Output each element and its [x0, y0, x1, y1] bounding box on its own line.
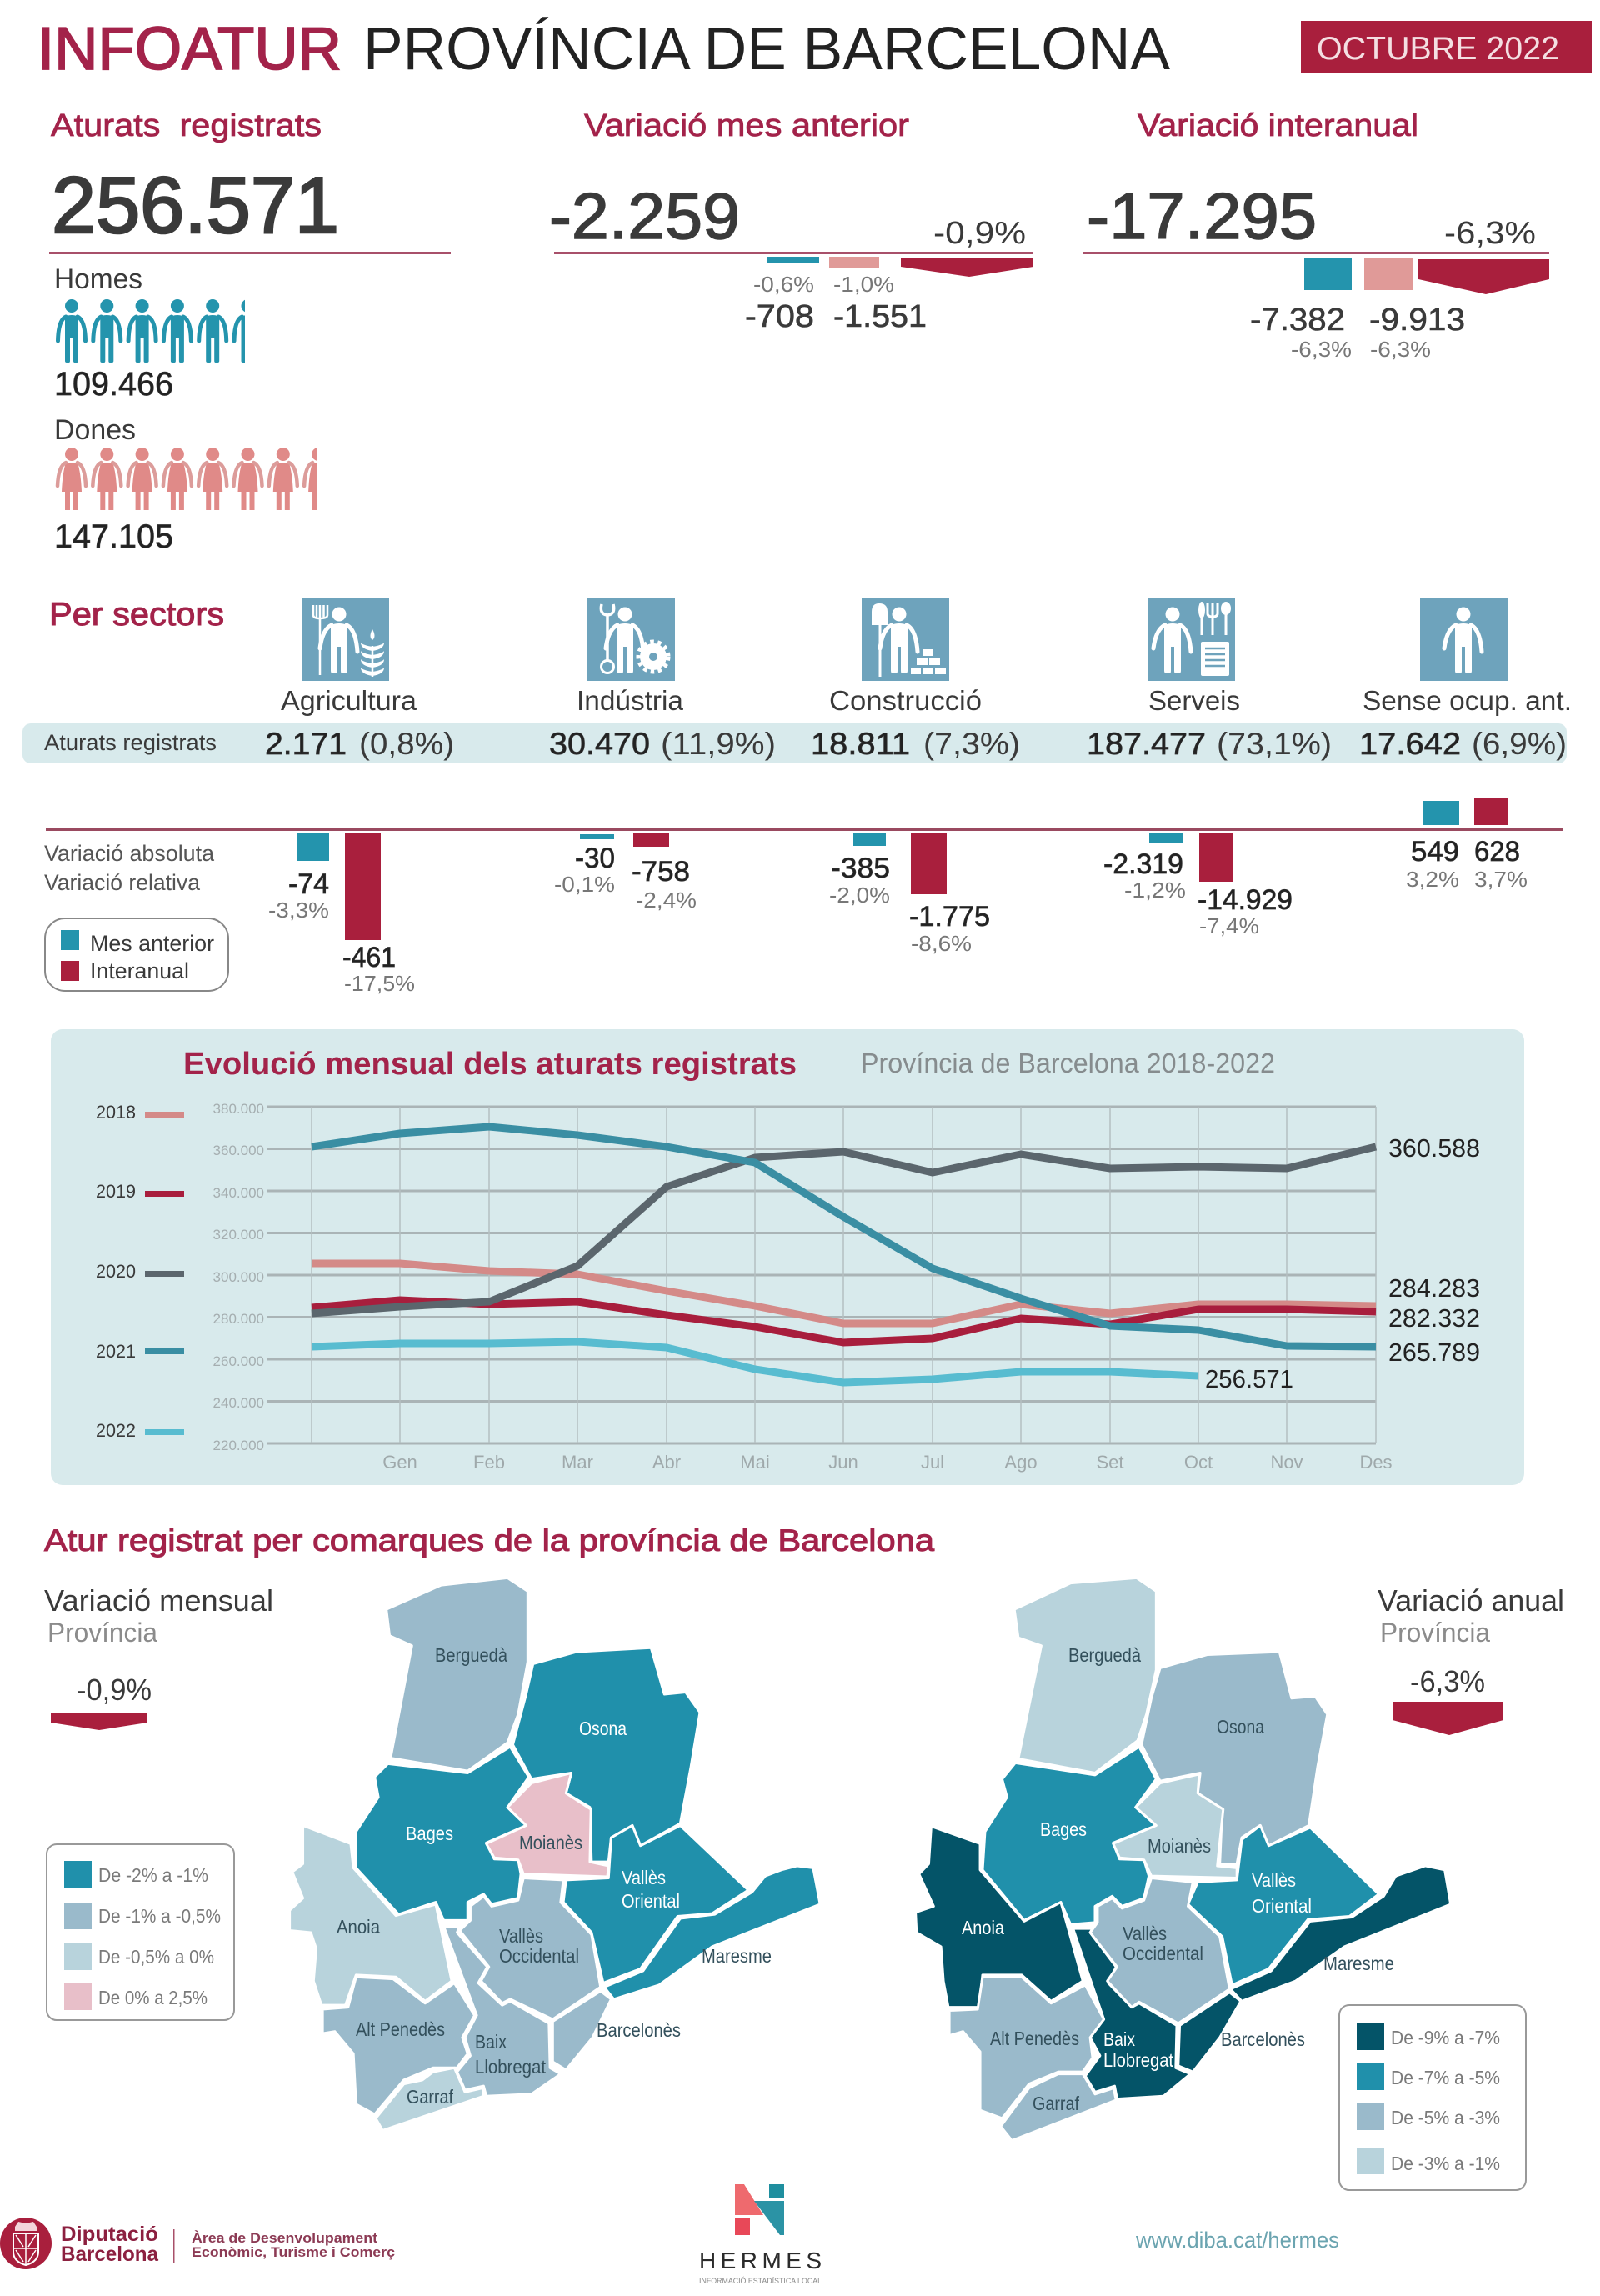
sector labels: Agricultura	[281, 685, 418, 716]
map labels: Berguedà	[1068, 1644, 1141, 1666]
sector labels	[281, 685, 1572, 716]
panel: variació anual	[916, 1578, 1564, 2190]
percent: -0,9%	[933, 216, 1026, 251]
map labels: Occidental	[499, 1945, 579, 1967]
x axis labels	[382, 1452, 1392, 1473]
series 2020	[312, 1147, 1376, 1313]
footer: website: www.diba.cat/hermes	[1135, 2228, 1339, 2253]
Vallès Oriental	[563, 1825, 748, 1983]
Vallès Occidental	[460, 1878, 601, 2019]
subheading: província: Província	[1380, 1618, 1490, 1648]
panel: variació mes anterior	[549, 108, 1033, 334]
x axis labels: Gen	[382, 1452, 418, 1473]
Alt Penedès	[322, 1977, 475, 2114]
indústria bars: -2,4%	[636, 888, 697, 913]
heading: evolució mensual: Evolució mensual dels aturats registrats	[183, 1047, 797, 1082]
breakdown numbers: -0,6%	[753, 272, 814, 297]
icon: women pictogram	[58, 448, 332, 510]
x axis labels: Feb	[473, 1452, 505, 1473]
series 2022	[312, 1342, 1198, 1383]
year legend: 2022	[96, 1420, 136, 1441]
total value: 256.571	[52, 161, 339, 250]
end values: 360.588	[1388, 1133, 1480, 1163]
agricultura bars: -461	[342, 942, 396, 973]
panel: aturats registrats	[49, 108, 451, 555]
y axis labels	[213, 1101, 264, 1453]
map labels: Garraf	[1032, 2093, 1080, 2114]
Maresme	[604, 1866, 820, 1999]
end values	[1205, 1133, 1480, 1393]
Moianès	[1113, 1774, 1237, 1878]
Bages	[356, 1747, 529, 1920]
homes value: 109.466	[54, 366, 173, 403]
band: aturats registrats: Aturats registrats	[44, 730, 217, 755]
Maresme	[1231, 1866, 1451, 2001]
grid	[268, 1107, 1376, 1443]
breakdown numbers: -6,3%	[1291, 337, 1352, 362]
subheading: província: Província	[48, 1618, 158, 1648]
footer: diputació logo: Barcelona	[61, 2243, 159, 2266]
row labels: Variació absoluta	[44, 841, 215, 866]
x axis labels: Set	[1096, 1452, 1124, 1473]
year legend: 2020	[96, 1261, 136, 1282]
breakdown numbers: -6,3%	[1370, 337, 1431, 362]
row labels: Variació relativa	[44, 870, 201, 895]
bars: men, women, total	[768, 257, 1033, 277]
map: variació anual	[916, 1578, 1451, 2141]
homes label: Homes	[54, 263, 142, 295]
map labels: Baix	[475, 2031, 507, 2053]
end values: 284.283	[1388, 1273, 1480, 1303]
Osona	[1142, 1652, 1328, 1864]
footer: diputació logo: Econòmic, Turisme i Comerç	[192, 2244, 395, 2260]
bar chart: variació per sector	[44, 798, 1563, 996]
x axis labels: Jul	[921, 1452, 944, 1473]
percent: -6,3%	[1444, 216, 1536, 251]
map labels: Alt Penedès	[990, 2028, 1079, 2049]
year legend	[96, 1102, 184, 1441]
heading: variació mensual: Variació mensual	[44, 1583, 273, 1618]
band: aturats registrats	[22, 723, 1567, 763]
y axis labels: 280.000	[213, 1311, 264, 1327]
heading: aturats registrats: Aturats registrats	[51, 108, 322, 143]
construcció bars: -8,6%	[911, 931, 972, 956]
Alt Penedès	[949, 1977, 1104, 2118]
serveis bars: -14.929	[1198, 884, 1292, 916]
legend	[45, 918, 228, 991]
row labels	[44, 841, 215, 895]
sector labels: Construcció	[829, 685, 982, 716]
end values: 265.789	[1388, 1338, 1480, 1367]
bars: men, women, total	[1304, 258, 1549, 294]
sense ocupació bars: 3,7%	[1474, 867, 1528, 892]
y axis labels: 360.000	[213, 1143, 264, 1158]
icon: men pictogram	[58, 299, 262, 363]
end values: 282.332	[1388, 1303, 1480, 1333]
icon: agricultura	[302, 598, 389, 681]
y axis labels: 240.000	[213, 1395, 264, 1411]
map labels: Oriental	[622, 1890, 680, 1912]
x axis labels: Nov	[1270, 1452, 1303, 1473]
sector labels: Sense ocup. ant.	[1362, 685, 1572, 716]
sense ocupació bars: 3,2%	[1406, 867, 1459, 892]
map labels: Maresme	[1323, 1953, 1394, 1974]
band: aturats registrats: 17.642	[1359, 727, 1461, 761]
map labels: Llobregat	[1103, 2049, 1174, 2071]
map labels	[337, 1644, 772, 2108]
legend: De -7% a -5%	[1391, 2067, 1500, 2088]
year legend: 2018	[96, 1102, 136, 1123]
x axis labels: Ago	[1004, 1452, 1038, 1473]
map labels: Barcelonès	[1221, 2028, 1305, 2050]
map labels: Llobregat	[475, 2056, 547, 2078]
year legend: 2021	[96, 1341, 136, 1362]
construcció bars	[829, 833, 990, 956]
Berguedà	[1014, 1578, 1156, 1773]
map labels: Garraf	[407, 2086, 454, 2108]
series 2021	[312, 1127, 1376, 1347]
indústria bars: -758	[632, 856, 690, 888]
agricultura bars	[268, 833, 415, 996]
dones value: 147.105	[54, 518, 173, 555]
arrow	[51, 1713, 148, 1730]
legend: De -9% a -7%	[1391, 2027, 1500, 2048]
band: aturats registrats: (7,3%)	[923, 727, 1020, 761]
agricultura bars: -3,3%	[268, 898, 329, 923]
breakdown numbers: -1,0%	[833, 272, 894, 297]
legend: De -0,5% a 0%	[98, 1946, 214, 1968]
icon: seal	[0, 2218, 52, 2269]
Vallès Oriental	[1188, 1825, 1378, 1985]
heading: per sectors: Per sectors	[49, 597, 224, 633]
Anoia	[916, 1826, 1082, 2008]
series 2019	[312, 1300, 1376, 1343]
breakdown numbers	[745, 272, 927, 334]
band: aturats registrats: (11,9%)	[661, 727, 776, 761]
Moianès	[487, 1773, 608, 1877]
end values: 256.571	[1205, 1364, 1293, 1393]
title: PROVÍNCIA DE BARCELONA	[363, 16, 1170, 83]
band: aturats registrats: 18.811	[811, 727, 910, 761]
footer: hermes logo: INFORMACIÓ ESTADÍSTICA LOCAL	[699, 2277, 822, 2286]
icon: construcció	[862, 598, 949, 681]
x axis labels: Mai	[740, 1452, 770, 1473]
breakdown numbers: -1.551	[833, 299, 927, 334]
value: -2.259	[549, 179, 740, 253]
serveis bars	[1103, 833, 1292, 938]
heading: variació anual: Variació anual	[1378, 1583, 1564, 1618]
map labels: Osona	[579, 1718, 627, 1739]
footer: diputació logo: Diputació	[61, 2223, 158, 2246]
map labels: Osona	[1217, 1716, 1264, 1738]
map labels: Bages	[1040, 1818, 1087, 1840]
breakdown numbers: -7.382	[1250, 303, 1345, 338]
x axis labels: Mar	[562, 1452, 593, 1473]
sector labels: Indústria	[577, 685, 684, 716]
icon: serveis	[1148, 598, 1235, 681]
band: aturats registrats: (73,1%)	[1217, 727, 1332, 761]
heading: variació mes anterior: Variació mes anterior	[584, 108, 909, 143]
panel: variació interanual	[1082, 108, 1549, 362]
value: -17.295	[1087, 179, 1317, 253]
sector labels: Serveis	[1148, 685, 1240, 716]
map labels: Alt Penedès	[356, 2018, 445, 2040]
y axis labels: 380.000	[213, 1101, 264, 1117]
footer: diputació logo	[0, 2218, 395, 2269]
Baix Llobregat	[1073, 1928, 1190, 2099]
Barcelonès	[1178, 1993, 1241, 2072]
footer: hermes logo	[699, 2184, 822, 2286]
Vallès Occidental	[1090, 1878, 1229, 2023]
Berguedà	[387, 1578, 528, 1771]
agricultura bars: -74	[288, 868, 329, 900]
legend: Mes anterior	[90, 931, 214, 956]
x axis labels: Des	[1359, 1452, 1392, 1473]
map labels: Anoia	[337, 1916, 380, 1938]
Baix Llobregat	[444, 1927, 561, 2096]
map labels: Vallès	[1252, 1869, 1296, 1891]
Osona	[512, 1648, 700, 1862]
panel: evolució mensual	[51, 1029, 1524, 1485]
map labels	[962, 1644, 1394, 2114]
map labels: Moianès	[1148, 1835, 1211, 1857]
band: aturats registrats: 2.171	[265, 727, 347, 761]
breakdown numbers: -708	[745, 299, 814, 334]
Garraf	[1001, 2074, 1116, 2141]
map labels: Anoia	[962, 1917, 1004, 1938]
breakdown numbers	[1250, 303, 1465, 362]
y axis labels: 260.000	[213, 1353, 264, 1369]
construcció bars: -2,0%	[829, 883, 890, 908]
heading: atur per comarques: Atur registrat per comarques de la província de Barcelona	[44, 1523, 934, 1558]
band: aturats registrats: (0,8%)	[359, 727, 454, 761]
legend: De 0% a 2,5%	[98, 1987, 208, 2008]
dones label: Dones	[54, 414, 136, 446]
date badge: OCTUBRE 2022	[1317, 31, 1559, 67]
map labels: Vallès	[499, 1925, 543, 1947]
map: variació mensual	[290, 1578, 820, 2130]
icon: sense ocupació anterior	[1420, 598, 1508, 681]
legend: De -1% a -0,5%	[98, 1905, 221, 1927]
map labels: Oriental	[1252, 1895, 1312, 1917]
map labels: Baix	[1103, 2028, 1135, 2050]
Garraf	[376, 2068, 483, 2130]
y axis labels: 340.000	[213, 1185, 264, 1201]
legend: De -3% a -1%	[1391, 2153, 1500, 2174]
year legend: 2019	[96, 1181, 136, 1202]
legend: De -5% a -3%	[1391, 2107, 1500, 2128]
icon: hermes H	[735, 2184, 784, 2235]
sense ocupació bars: 628	[1474, 836, 1520, 868]
Bages	[982, 1747, 1156, 1924]
footer: hermes logo: HERMES	[699, 2248, 822, 2273]
serveis bars: -1,2%	[1124, 878, 1186, 903]
panel: per sectors	[22, 597, 1572, 996]
legend: De -2% a -1%	[98, 1864, 208, 1886]
y axis labels: 320.000	[213, 1227, 264, 1243]
indústria bars: -0,1%	[554, 872, 615, 897]
date badge	[1301, 21, 1592, 73]
map labels: Vallès	[622, 1867, 666, 1888]
map labels: Bages	[406, 1823, 453, 1844]
map labels: Berguedà	[435, 1644, 508, 1666]
map labels: Occidental	[1122, 1943, 1203, 1964]
indústria bars: -30	[575, 843, 615, 874]
sense ocupació bars: 549	[1411, 836, 1459, 868]
construcció bars: -1.775	[909, 901, 990, 933]
map labels: Vallès	[1122, 1923, 1167, 1944]
agricultura bars: -17,5%	[344, 971, 415, 996]
title: INFOATUR	[38, 16, 342, 83]
heading: variació interanual: Variació interanual	[1138, 108, 1418, 143]
footer: diputació logo: Àrea de Desenvolupament	[192, 2230, 378, 2246]
serveis bars: -2.319	[1103, 848, 1183, 880]
indústria bars	[554, 833, 697, 913]
y axis labels: 220.000	[213, 1438, 264, 1453]
line chart	[213, 1101, 1480, 1473]
Anoia	[290, 1825, 452, 2005]
map labels: Maresme	[702, 1945, 772, 1967]
map labels: Barcelonès	[597, 2019, 681, 2041]
legend: Interanual	[90, 958, 189, 983]
Barcelonès	[552, 1991, 611, 2070]
x axis labels: Oct	[1184, 1452, 1212, 1473]
legend	[1339, 2005, 1526, 2190]
percent: -0,9%	[77, 1673, 152, 1707]
band: aturats registrats: (6,9%)	[1472, 727, 1567, 761]
x axis labels: Abr	[652, 1452, 681, 1473]
series 2018	[312, 1263, 1376, 1323]
band: aturats registrats: 187.477	[1087, 727, 1206, 761]
serveis bars: -7,4%	[1199, 913, 1259, 938]
x axis labels: Jun	[828, 1452, 858, 1473]
arrow	[1392, 1702, 1503, 1735]
panel: variació mensual	[44, 1578, 820, 2130]
sense ocupació bars	[1406, 798, 1528, 892]
map labels: Moianès	[519, 1832, 582, 1853]
band: aturats registrats: 30.470	[549, 727, 650, 761]
construcció bars: -385	[831, 853, 890, 884]
percent: -6,3%	[1410, 1664, 1485, 1698]
y axis labels: 300.000	[213, 1269, 264, 1285]
icon: indústria	[588, 598, 675, 681]
legend	[47, 1844, 234, 2020]
breakdown numbers: -9.913	[1369, 303, 1465, 338]
subtitle: Província de Barcelona 2018-2022	[861, 1048, 1275, 1078]
